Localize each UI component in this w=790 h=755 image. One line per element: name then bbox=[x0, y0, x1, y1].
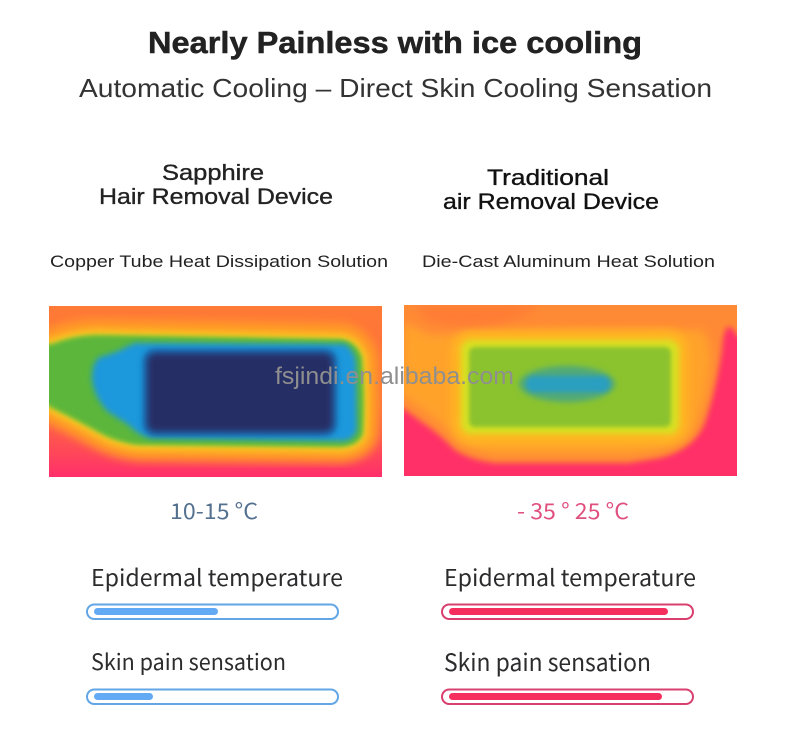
watermark: fsjindi.en.alibaba.com bbox=[275, 363, 514, 390]
right temperature value: - 35 ° 25 °C bbox=[517, 494, 629, 526]
heatmap: sapphire device bbox=[30, 306, 382, 477]
label: right skin pain: Skin pain sensation bbox=[444, 643, 651, 678]
heading: sapphire device bbox=[99, 160, 333, 209]
left temperature value: 10-15 °C bbox=[170, 494, 258, 526]
right solution caption: Die-Cast Aluminum Heat Solution bbox=[422, 252, 715, 271]
heading: traditional device bbox=[443, 165, 659, 214]
heading: sapphire device: Hair Removal Device bbox=[99, 184, 333, 209]
heading: traditional device: Traditional bbox=[487, 165, 609, 190]
subtitle: Automatic Cooling – Direct Skin Cooling Sensation bbox=[79, 73, 712, 103]
left solution caption: Copper Tube Heat Dissipation Solution bbox=[50, 252, 388, 271]
heading: sapphire device: Sapphire bbox=[162, 160, 264, 185]
title: Nearly Painless with ice cooling bbox=[148, 25, 642, 60]
bar: right epidermal temperature bbox=[442, 604, 693, 619]
bar: left skin pain bbox=[87, 690, 338, 704]
bar: left epidermal temperature bbox=[87, 604, 338, 619]
bar: right skin pain bbox=[442, 690, 693, 704]
heatmap: traditional device bbox=[404, 305, 737, 476]
heading: traditional device: air Removal Device bbox=[443, 189, 659, 214]
label: left epidermal temperature: Epidermal temperature bbox=[91, 559, 343, 593]
label: left skin pain: Skin pain sensation bbox=[91, 645, 286, 677]
label: right epidermal temperature: Epidermal temperature bbox=[444, 559, 696, 593]
